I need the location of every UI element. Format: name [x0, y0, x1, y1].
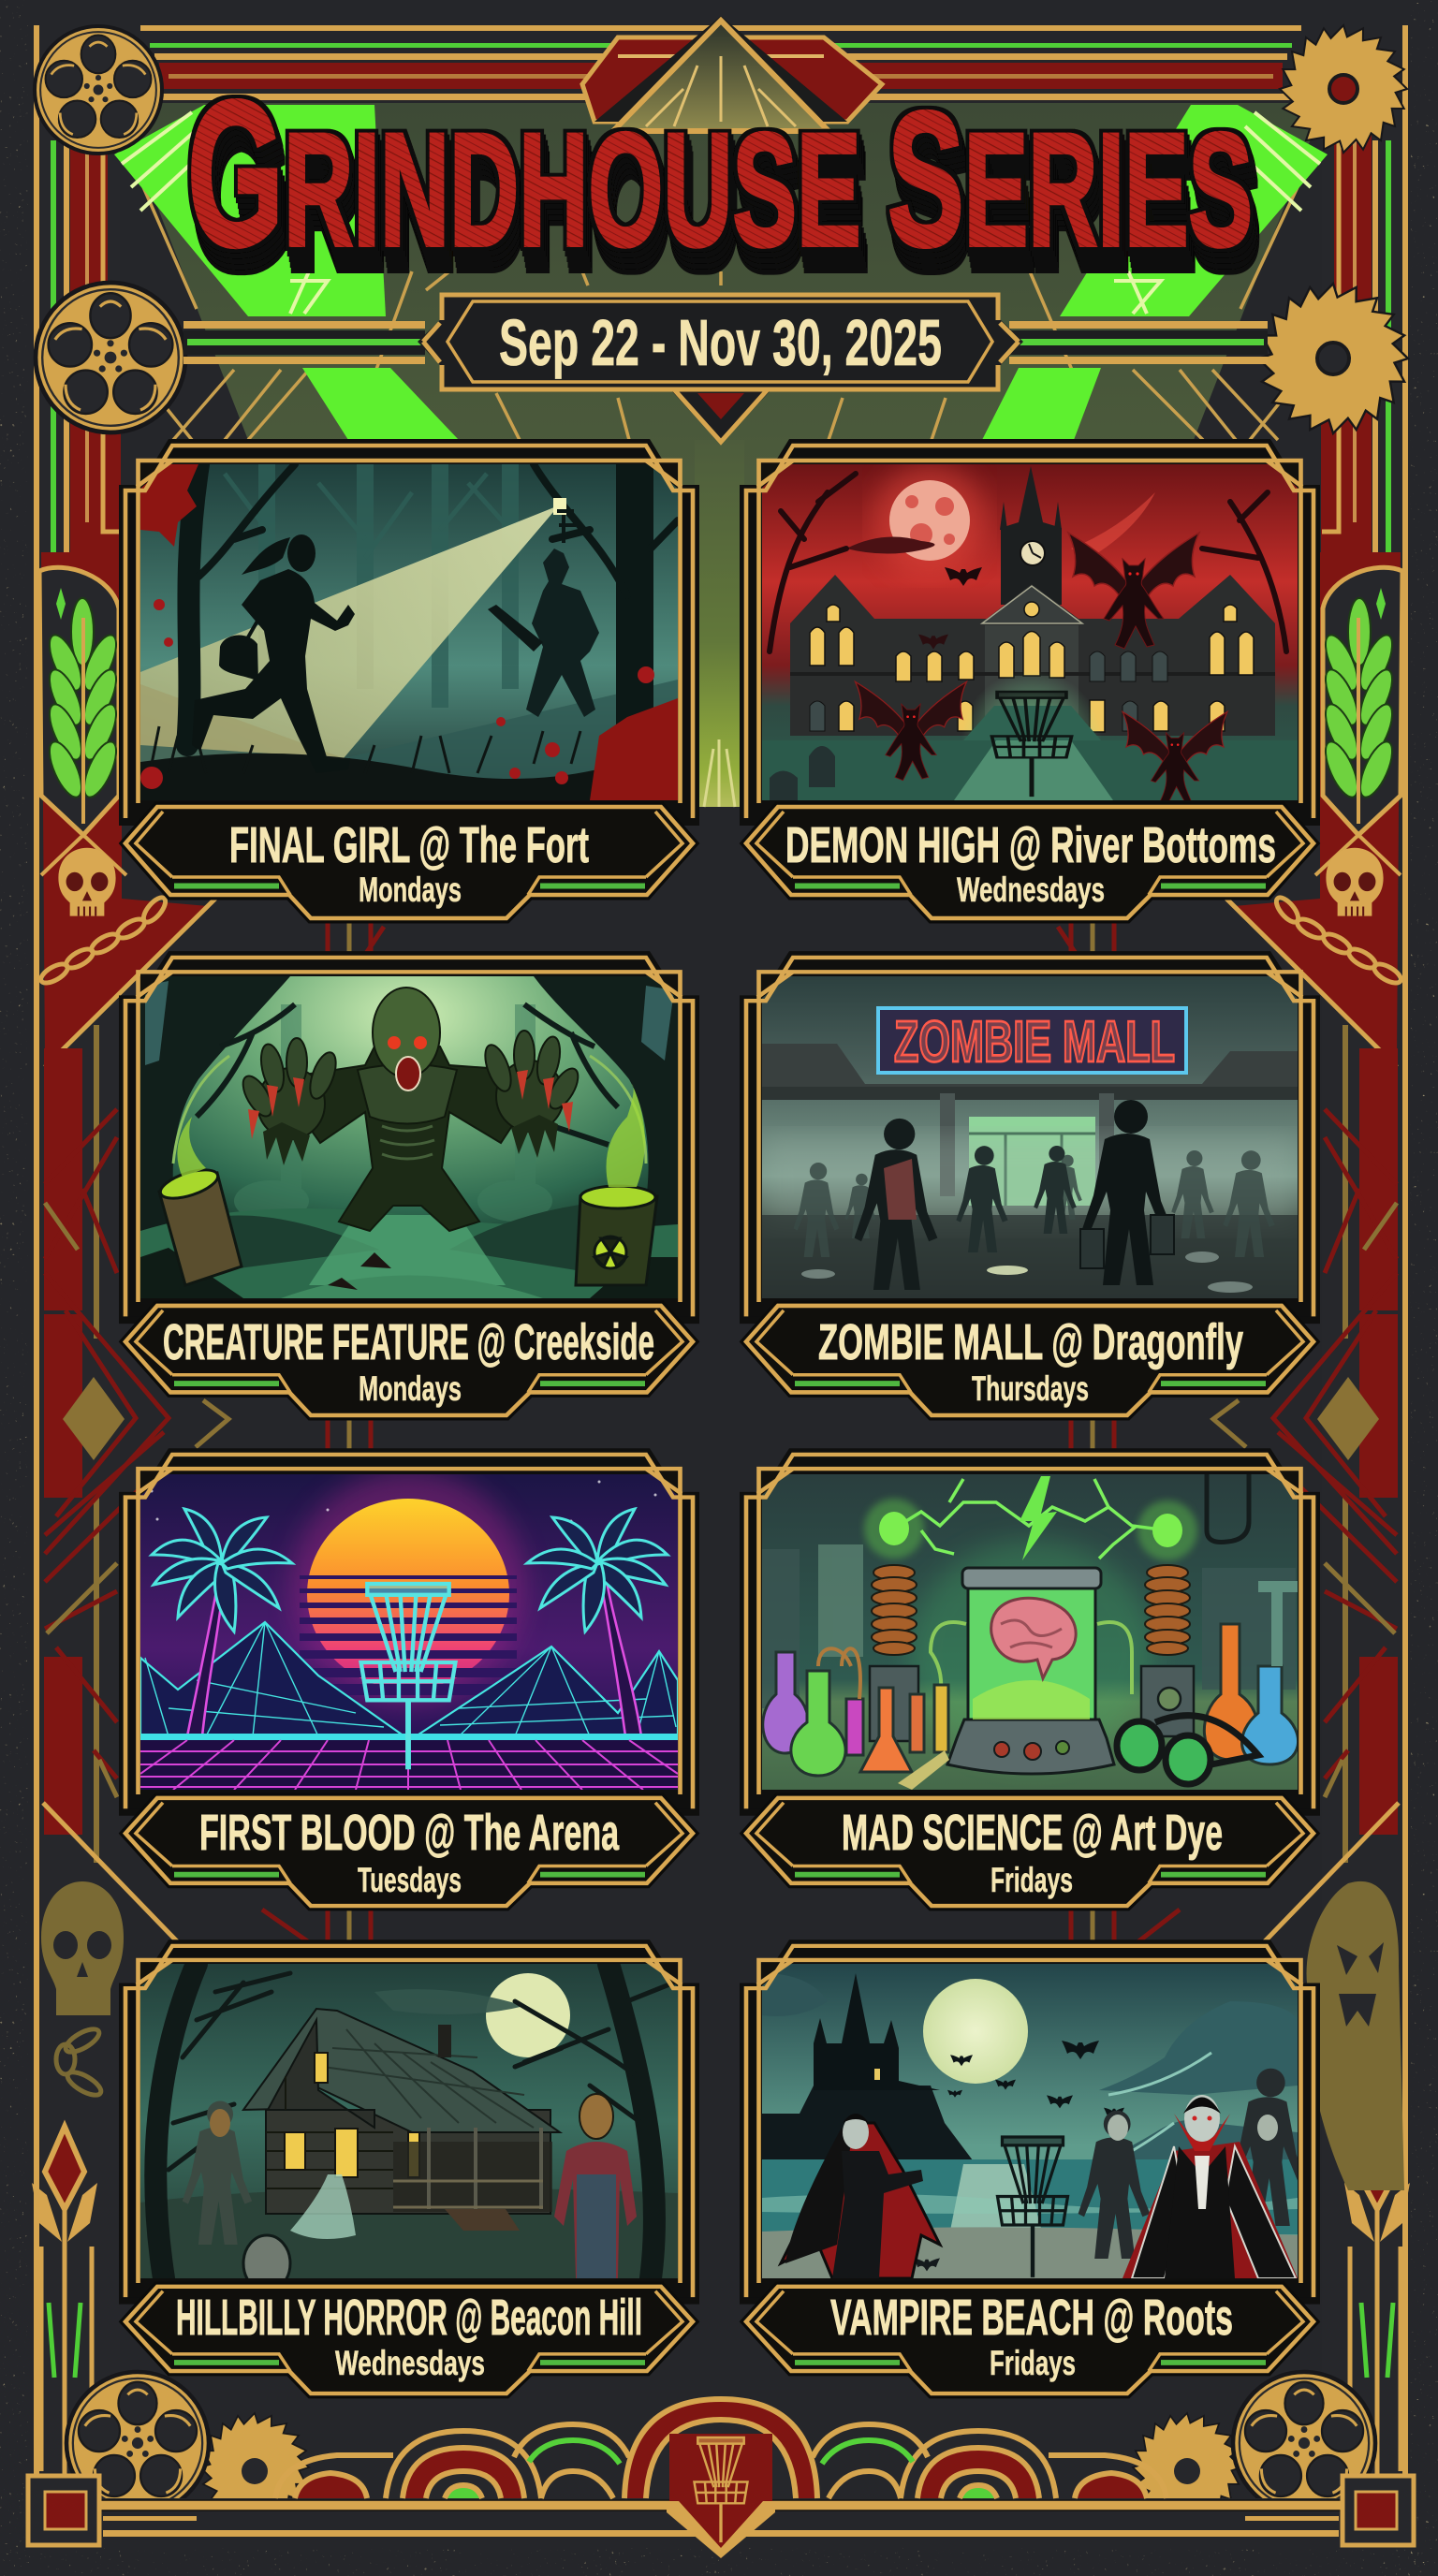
bottom frame bands [28, 2500, 1414, 2510]
castle and cliff [762, 2086, 991, 2165]
scene: zombies outside neon mall: ZOMBIE MALL [894, 1010, 1175, 1075]
card: First Blood [119, 1448, 699, 1906]
card: Zombie Mall [740, 951, 1320, 1415]
date banner pointer [670, 389, 771, 445]
left side ornament column [32, 25, 228, 2545]
day: Wednesdays: Wednesdays [957, 871, 1105, 909]
day: Fridays: Fridays [990, 2344, 1076, 2382]
bottom right corner [1343, 2476, 1414, 2545]
date banner: Sep 22 - Nov 30, 2025 [499, 306, 942, 379]
card: Creature Feature [119, 951, 699, 1415]
top centre crest [582, 16, 882, 131]
faded ghoul, lower right [1307, 1881, 1404, 2190]
goggles [1117, 1716, 1258, 1784]
gold ray lines in header [131, 159, 1311, 440]
top band stripes [140, 25, 1301, 100]
saw blade top right [1280, 25, 1407, 153]
olive centre gap [695, 440, 744, 807]
reel and saw, bottom left [64, 2370, 311, 2498]
jar [947, 1568, 1114, 1774]
left vampire [781, 2114, 940, 2278]
title: GRINDHOUSE SERIES [187, 58, 1253, 290]
label: FIRST BLOOD: FIRST BLOOD @ The Arena [199, 1805, 620, 1861]
ghost [290, 2174, 356, 2239]
girl silhouette [192, 534, 355, 773]
scene: haunted school with demons [762, 464, 1298, 800]
card: Hillbilly Horror [119, 1939, 699, 2393]
card: Final Girl [119, 439, 699, 918]
footer ornament [28, 2372, 1414, 2558]
label: MAD SCIENCE: MAD SCIENCE @ Art Dye [842, 1805, 1223, 1861]
scene: vampires on moonlit beach [762, 1964, 1298, 2278]
card: Demon High [740, 439, 1320, 918]
toxic barrels [157, 1164, 657, 1285]
lightning [894, 1479, 1167, 1559]
killer silhouette [488, 549, 599, 717]
scene: swamp creature and toxic barrels [140, 976, 678, 1298]
day: Mondays: Mondays [359, 1369, 462, 1408]
film reel left [36, 283, 185, 432]
day: Thursdays: Thursdays [972, 1369, 1089, 1408]
beam light rays [122, 112, 1320, 314]
small ornament lines between rows [262, 922, 1180, 1942]
masked figures [183, 2101, 252, 2245]
main vampire [1123, 2095, 1298, 2278]
day: Wednesdays: Wednesdays [335, 2344, 485, 2382]
scene: brain in jar laboratory [762, 1474, 1298, 1790]
day: Fridays: Fridays [990, 1861, 1073, 1899]
reel and saw, bottom right [1131, 2370, 1378, 2498]
day: Tuesdays: Tuesdays [358, 1861, 462, 1899]
header olive panel [117, 103, 1325, 496]
cabin [266, 2110, 550, 2214]
gap rays [704, 739, 735, 807]
label: FINAL GIRL: FINAL GIRL @ The Fort [229, 817, 589, 873]
card: Mad Science [740, 1448, 1320, 1906]
scene: haunted cabin at night [140, 1964, 678, 2278]
date banner bars [183, 321, 1268, 364]
coils [872, 1565, 1190, 1655]
label: HILLBILLY HORROR: HILLBILLY HORROR @ Beacon Hill [176, 2290, 642, 2346]
bottom left corner [28, 2476, 99, 2545]
flasks [763, 1624, 1299, 1776]
card: Vampire Beach [740, 1939, 1320, 2393]
saw blade right [1258, 284, 1408, 433]
art deco arches [275, 2399, 1167, 2498]
disc basket shield [667, 2434, 775, 2558]
neon green beams [114, 105, 1328, 440]
film reel top left [35, 26, 162, 154]
scene: zombies outside neon mall [762, 976, 1298, 1298]
distant vampires [1078, 2069, 1306, 2259]
creature [295, 1046, 524, 1231]
scene: synthwave sunset disc basket [140, 1474, 678, 1790]
day: Mondays: Mondays [359, 871, 462, 909]
right side ornament column [1213, 25, 1410, 2545]
date banner [418, 293, 1023, 391]
label: CREATURE FEATURE: CREATURE FEATURE @ Creekside [163, 1314, 654, 1370]
faded skull with chain, lower left [41, 1881, 124, 2100]
scene: girl chased through forest by chainsaw killer [140, 464, 678, 800]
